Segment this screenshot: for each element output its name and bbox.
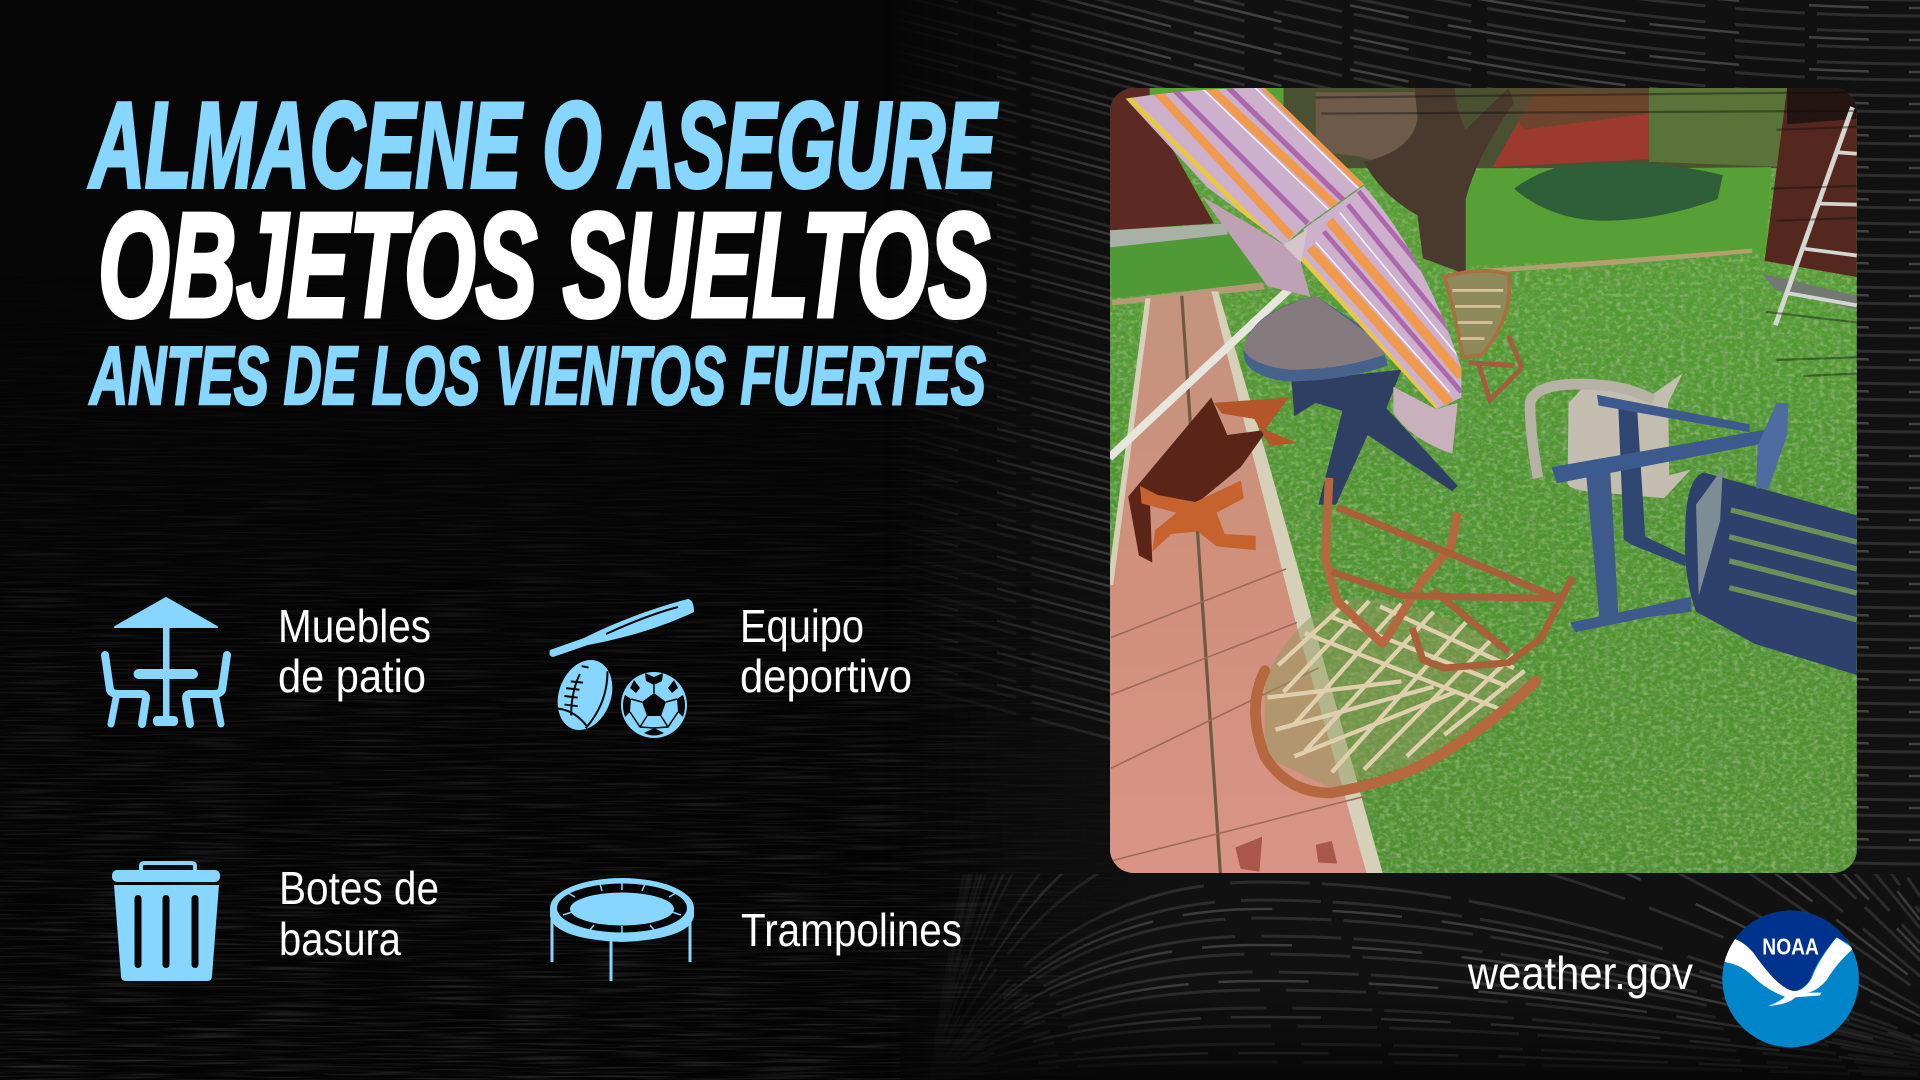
overturned wicker chair <box>1255 478 1573 793</box>
title line 1: ALMACENE O ASEGURE <box>88 77 998 213</box>
football <box>548 652 622 738</box>
label: sports equipment <box>740 600 912 702</box>
photo: storm-blown patio furniture on a lawn <box>1109 81 1857 873</box>
title line 3: ANTES DE LOS VIENTOS FUERTES <box>89 329 986 422</box>
back wicker chair <box>1444 271 1522 400</box>
label: patio furniture <box>278 600 431 702</box>
NOAA logo <box>1722 910 1859 1048</box>
icon: trampoline <box>550 878 694 981</box>
label: patio furniture: Muebles <box>278 600 431 652</box>
icon: trash can <box>112 863 220 981</box>
label: trampolines: Trampolines <box>741 904 962 956</box>
paved walkway <box>1109 291 1383 873</box>
label: trash cans <box>279 862 439 965</box>
label: sports equipment: Equipo <box>740 600 864 652</box>
bat <box>549 599 694 657</box>
label: patio furniture: de patio <box>278 650 426 702</box>
background trees and buildings <box>1109 88 1857 309</box>
label: trash cans: Botes de <box>279 862 439 914</box>
blue plastic chair <box>1551 395 1857 675</box>
NOAA wordmark: NOAA <box>1762 934 1819 960</box>
title <box>88 77 998 422</box>
umbrella canopy <box>1112 81 1471 454</box>
icon: patio furniture <box>105 598 227 726</box>
ladder <box>1775 107 1857 325</box>
umbrella pole <box>1110 290 1292 460</box>
table <box>1243 296 1458 505</box>
website label: weather.gov <box>1467 947 1693 999</box>
icon: sports equipment <box>548 599 694 738</box>
photo streak overlay <box>1316 92 1857 376</box>
label: sports equipment: deportivo <box>740 650 912 702</box>
soccer ball <box>621 672 687 738</box>
label: trash cans: basura <box>279 913 401 965</box>
title line 2: OBJETOS SUELTOS <box>98 183 990 348</box>
lawn <box>1109 88 1857 873</box>
concrete-weighted gray chair <box>1530 373 1691 498</box>
wooden bench <box>1128 397 1297 562</box>
